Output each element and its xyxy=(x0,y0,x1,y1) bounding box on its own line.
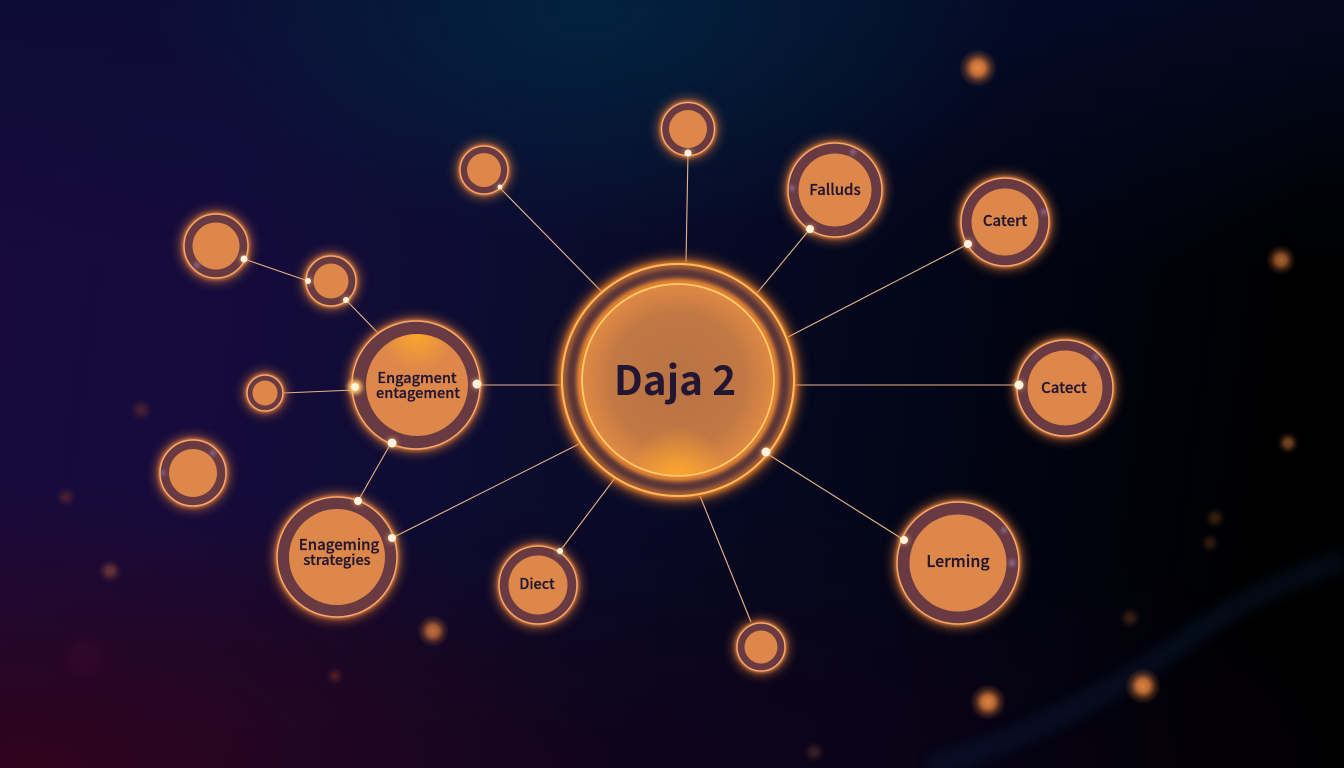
node: tiny left xyxy=(247,375,283,411)
node: Engaging strategies: Enageming xyxy=(299,534,380,555)
node: top small xyxy=(662,102,714,156)
node: far upper-left xyxy=(184,214,248,278)
central hub xyxy=(562,264,794,496)
hub label: Daja 2 xyxy=(614,348,736,407)
decorative wave bottom right xyxy=(930,560,1344,768)
node: Diect xyxy=(499,546,577,624)
node: Catect xyxy=(1014,340,1113,436)
node: Lerming xyxy=(897,502,1019,624)
node: Engagement: entagement xyxy=(376,382,460,403)
node: Engagement: Engagment xyxy=(377,367,457,388)
node: Engagement xyxy=(348,321,482,449)
node: Lerming: Lerming xyxy=(926,548,990,572)
node: Falluds: Falluds xyxy=(809,179,861,200)
node: left small with connector xyxy=(305,256,356,306)
node: Catert xyxy=(961,178,1049,266)
node: Engaging strategies xyxy=(277,497,397,617)
node: Falluds xyxy=(788,143,882,237)
node: Catect: Catect xyxy=(1041,377,1087,398)
connector lines xyxy=(244,153,1018,622)
node: bottom small xyxy=(737,623,785,671)
node: Catert: Catert xyxy=(983,210,1027,231)
node: Diect: Diect xyxy=(519,573,555,594)
node: upper-left small xyxy=(460,146,508,194)
node: lower-left xyxy=(160,440,226,506)
node: Engaging strategies: strategies xyxy=(303,549,371,570)
